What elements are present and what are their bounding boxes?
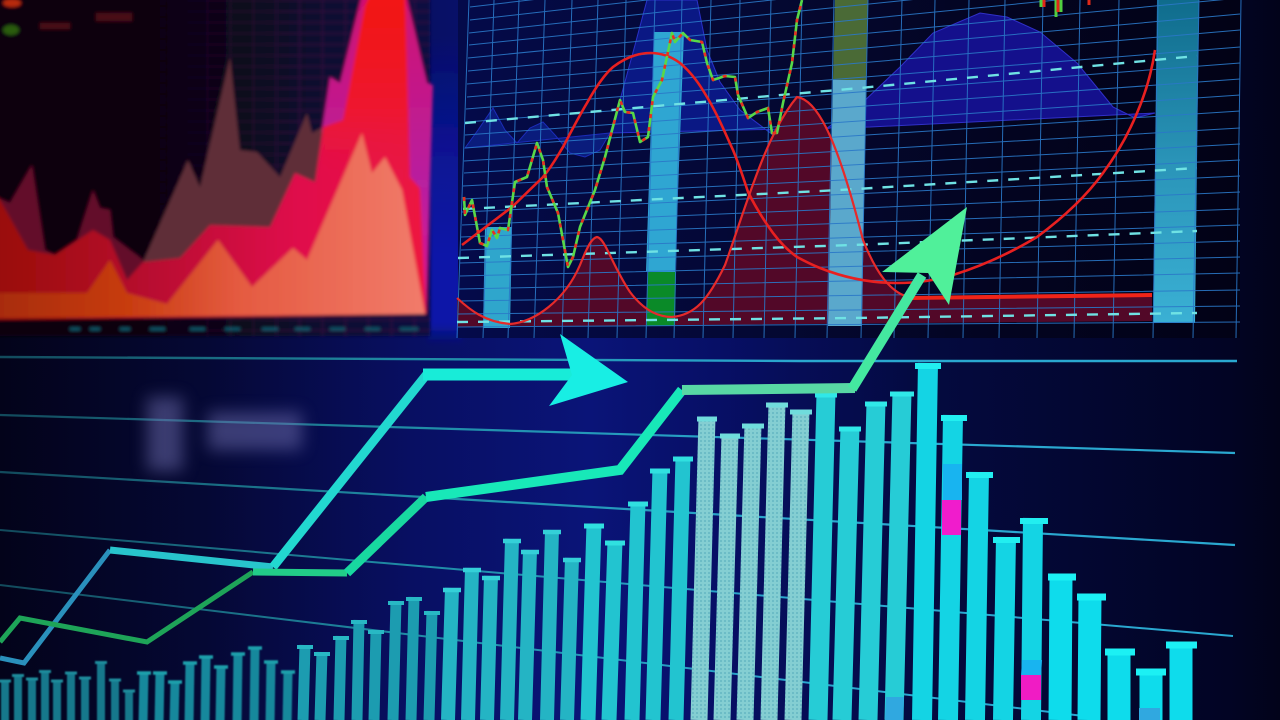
bars: pale textured group bbox=[697, 403, 812, 720]
bar highlight: upper blue segment bbox=[943, 464, 962, 500]
area: orange series bbox=[0, 133, 425, 318]
area: red series bbox=[0, 0, 426, 320]
legend dots and labels bbox=[3, 0, 132, 35]
column: green segment bbox=[646, 272, 676, 326]
bar highlight: bottom blue segments bbox=[885, 697, 1160, 720]
panel: right line chart bbox=[457, 0, 1241, 338]
axis tick labels bbox=[70, 328, 418, 330]
arrow: green trend bbox=[0, 207, 967, 642]
bars: tall group bbox=[815, 392, 914, 720]
area: brown series bbox=[143, 57, 330, 270]
red flat line bbox=[908, 295, 1152, 298]
bars: mid left bbox=[297, 597, 440, 720]
bar chart bbox=[0, 363, 1197, 720]
price line bbox=[464, 0, 802, 267]
blurred background label bbox=[147, 397, 302, 471]
column: cyan 4 bbox=[1153, 0, 1199, 323]
panel: left area chart bbox=[0, 0, 433, 336]
bars: right group bbox=[1048, 574, 1197, 720]
red curve: peaks bbox=[457, 97, 913, 324]
bar highlight: lower blue segment bbox=[1021, 660, 1042, 676]
blue hump: left bbox=[465, 108, 610, 157]
lower chart horizontal lines bbox=[0, 357, 1237, 718]
blue hump: right bbox=[827, 13, 1155, 128]
red curve: bell and tail bbox=[462, 50, 1155, 283]
maroon curve fill bbox=[457, 97, 1152, 327]
grid lines bbox=[457, 0, 1241, 338]
column: cyan 2 bbox=[646, 32, 684, 272]
bars: centre bbox=[584, 457, 693, 720]
price ticks top right bbox=[1041, 0, 1089, 17]
column: cyan 1 bbox=[483, 227, 512, 328]
area: purple series bbox=[322, 0, 433, 314]
bar highlight: upper magenta segment bbox=[942, 500, 961, 535]
bars: left bbox=[137, 647, 295, 720]
bars: far left bbox=[0, 661, 135, 720]
area: crimson series bbox=[0, 165, 143, 290]
blue hump: centre bbox=[610, 0, 830, 137]
bars: peak group bbox=[915, 363, 1048, 720]
arrow: cyan trend bbox=[0, 334, 628, 663]
bars: centre left bbox=[443, 530, 581, 720]
column: olive and pale blue bbox=[828, 0, 868, 326]
bar highlight: lower magenta segment bbox=[1021, 675, 1041, 700]
dashed level lines bbox=[457, 56, 1197, 322]
